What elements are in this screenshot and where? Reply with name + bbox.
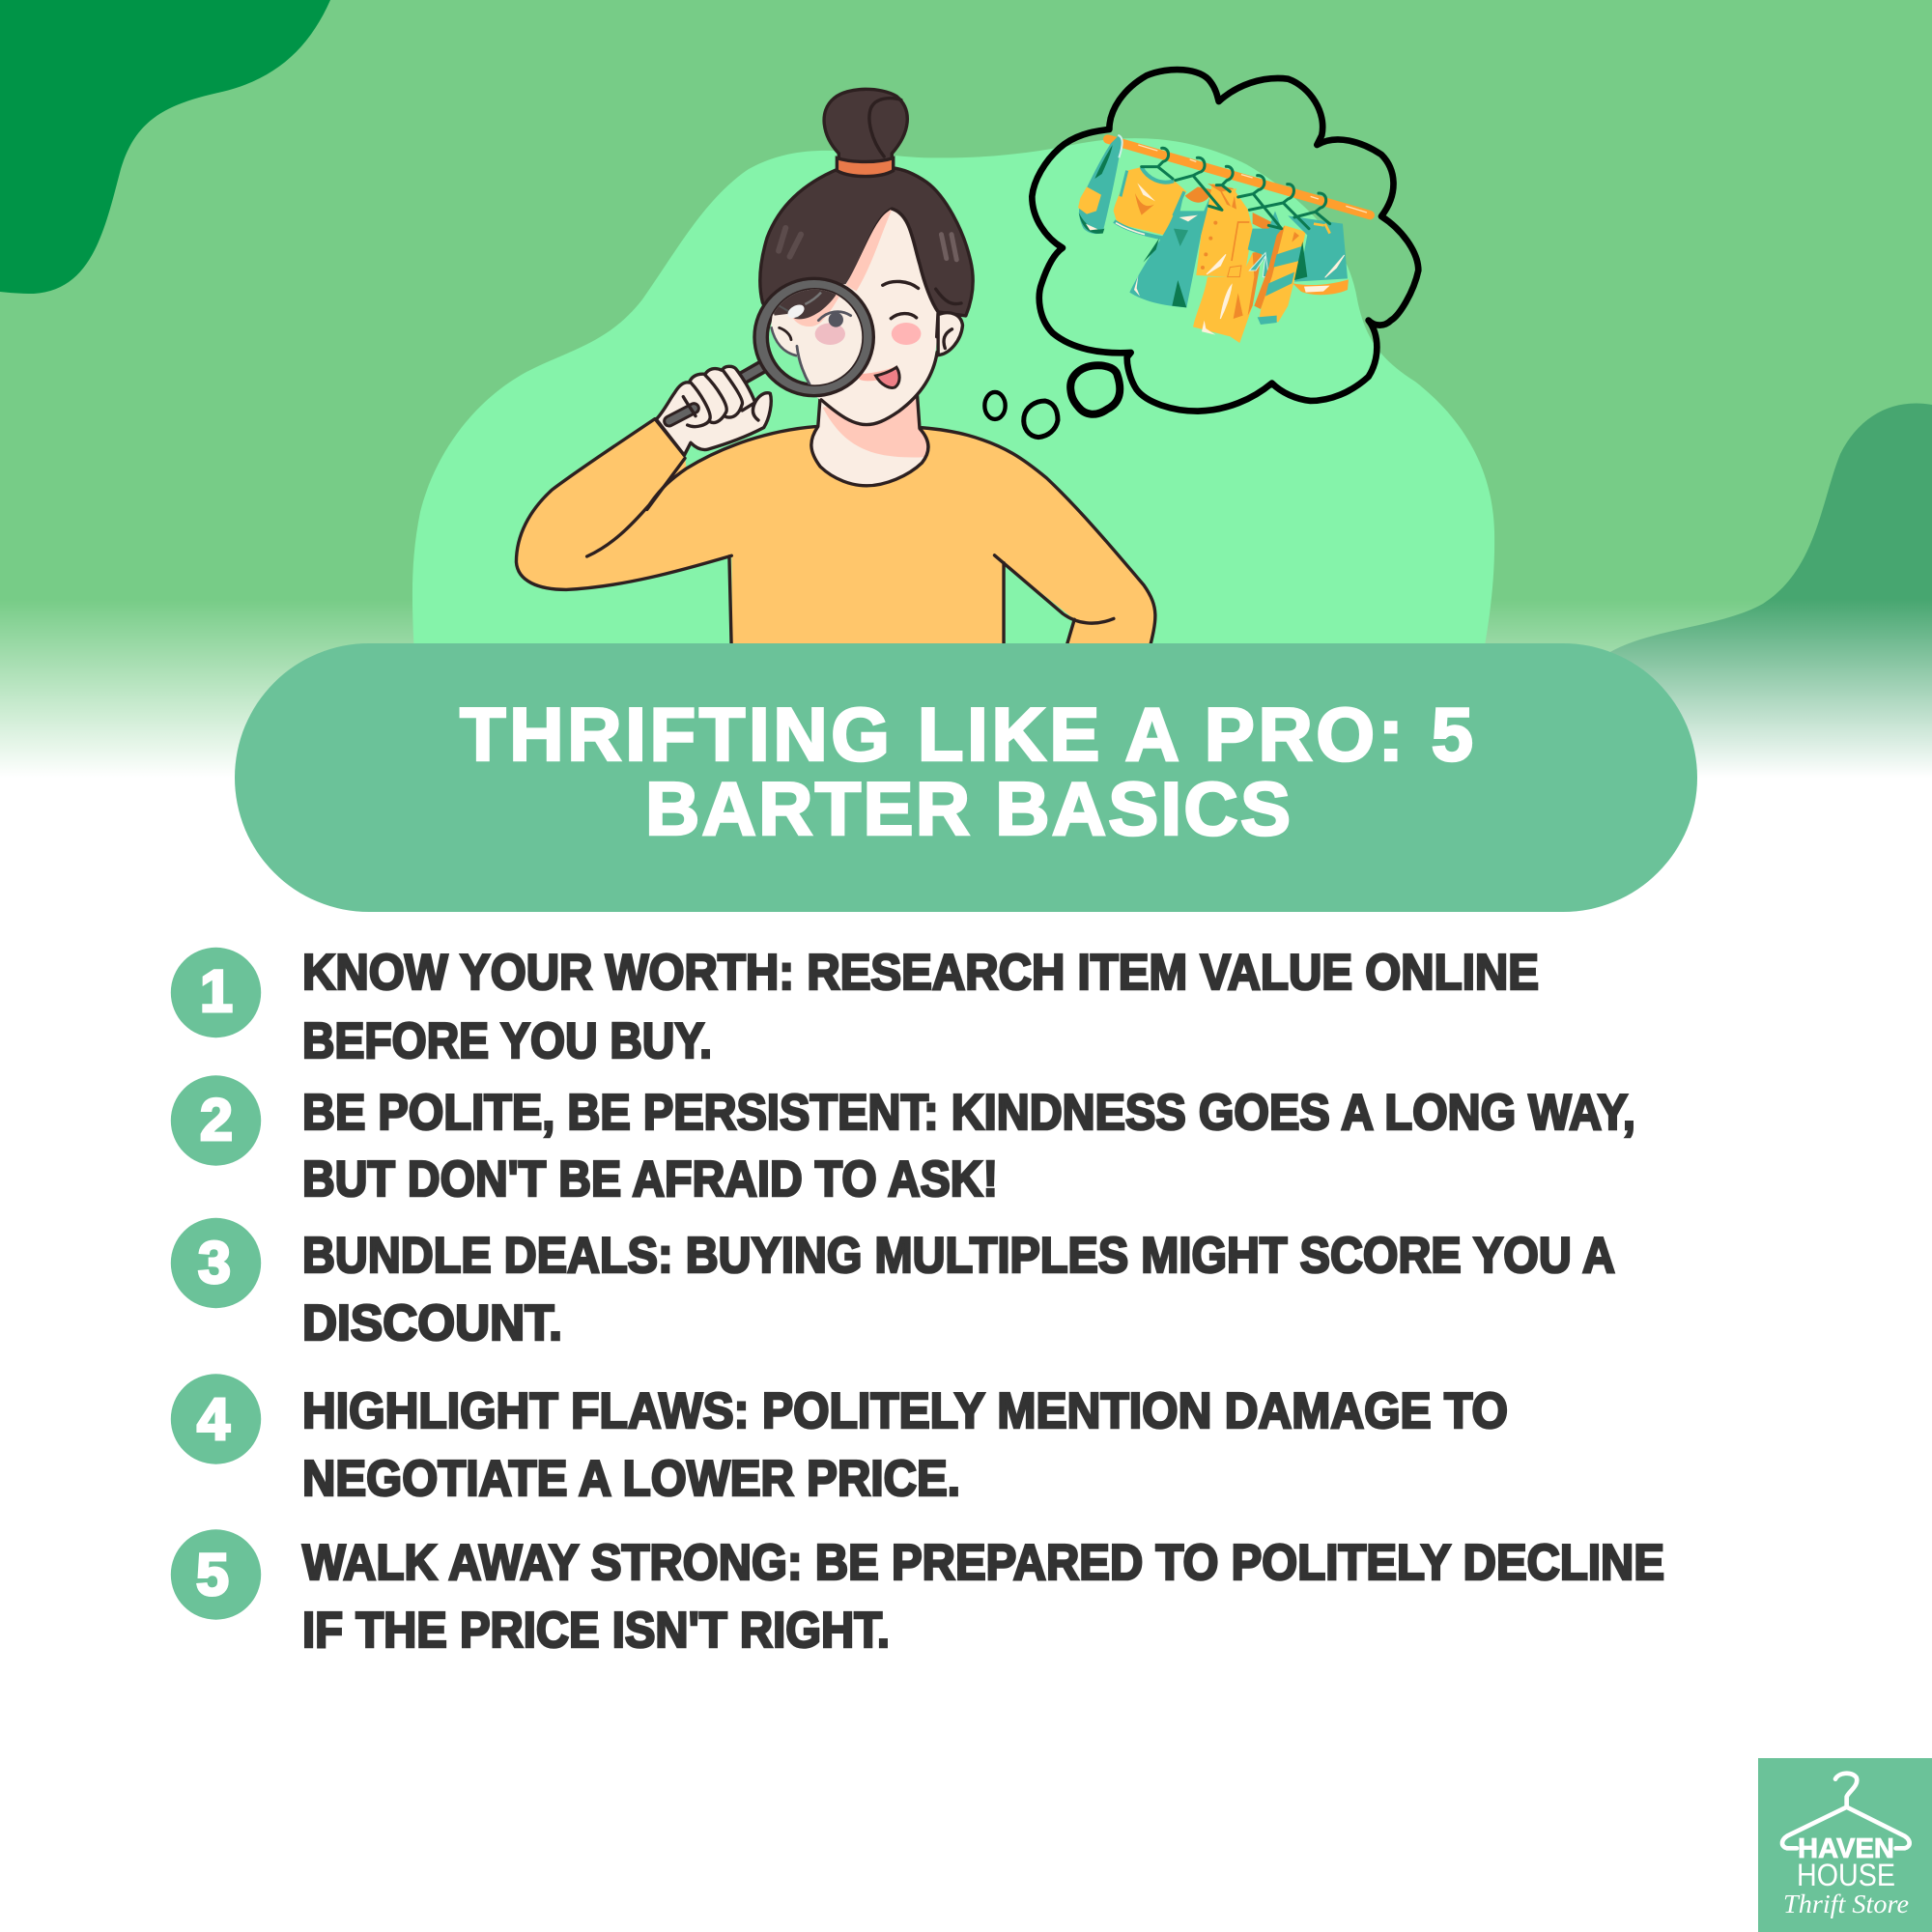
tip 4 text: HIGHLIGHT FLAWS: POLITELY MENTION DAMAGE TO (302, 1383, 1508, 1439)
clothes on a rail (1078, 135, 1370, 343)
tip 3 text: BUNDLE DEALS: BUYING MULTIPLES MIGHT SCORE YOU A (302, 1228, 1615, 1284)
character with magnifying glass (516, 89, 1155, 654)
logo: Haven House Thrift Store: Thrift Store (1783, 1889, 1909, 1918)
number badge 1 (171, 948, 261, 1037)
right ear (938, 313, 962, 355)
body, head and hair (516, 89, 1155, 654)
title: THRIFTING LIKE A PRO: 5 (460, 692, 1473, 777)
tip 5 (171, 1529, 1664, 1659)
tip 2 text (302, 1085, 1635, 1208)
teal wrap top with bow (1248, 211, 1282, 280)
tip 5 text: WALK AWAY STRONG: BE PREPARED TO POLITELY DECLINE (302, 1535, 1664, 1591)
green background (0, 0, 1932, 792)
bun and hair (760, 89, 973, 333)
tip 4 text: NEGOTIATE A LOWER PRICE. (302, 1451, 960, 1507)
icon: hanger (1782, 1774, 1910, 1848)
logo: Haven House Thrift Store (1758, 1758, 1932, 1932)
tip 2 text: BUT DON'T BE AFRAID TO ASK! (302, 1151, 998, 1208)
white fade over background (0, 599, 1932, 778)
tip 4 text (302, 1383, 1508, 1507)
clothes rail (1108, 139, 1370, 215)
blob: light green behind character (412, 138, 1494, 657)
cloud outline (1032, 70, 1418, 412)
tip 1 text: BEFORE YOU BUY. (302, 1013, 712, 1069)
hangers (1142, 148, 1330, 229)
number badge 3 (171, 1218, 261, 1308)
sleeve cuff (655, 419, 684, 455)
number badge 5: 5 (196, 1542, 229, 1607)
magnifying glass and hand (655, 278, 873, 455)
sweater (516, 419, 1155, 654)
number badge 1: 1 (200, 958, 233, 1024)
title (460, 692, 1473, 851)
tip 3 text (302, 1228, 1615, 1351)
number badge 2: 2 (200, 1087, 233, 1152)
number badge 4: 4 (197, 1386, 230, 1452)
mouth and tongue (857, 366, 896, 381)
logo: Haven House Thrift Store: HAVEN (1798, 1833, 1894, 1864)
blob: top-left dark green (0, 0, 330, 294)
yellow top (1114, 167, 1186, 239)
number badge 2 (171, 1075, 261, 1166)
tip 5 text (302, 1535, 1664, 1659)
tip 1 (171, 945, 1539, 1069)
title pill (235, 643, 1697, 912)
blob: right dark green (1608, 404, 1932, 792)
title: BARTER BASICS (645, 766, 1291, 851)
tip 3 text: DISCOUNT. (302, 1295, 562, 1351)
neck (811, 394, 928, 486)
teal shorts (1288, 215, 1349, 295)
thought bubble (984, 70, 1418, 438)
eyebrow (883, 281, 919, 288)
handbag (1078, 135, 1122, 234)
yellow shirt (1196, 184, 1253, 277)
tip 2 text: BE POLITE, BE PERSISTENT: KINDNESS GOES A LONG WAY, (302, 1085, 1635, 1141)
striped trousers (1254, 225, 1306, 325)
cheek (892, 323, 921, 345)
teal dress (1129, 186, 1214, 307)
tip 2 (171, 1075, 1635, 1208)
winking eye (891, 314, 917, 319)
logo: Haven House Thrift Store: HOUSE (1797, 1858, 1895, 1892)
face (779, 209, 962, 425)
number badge 3: 3 (198, 1230, 231, 1295)
hand holding handle (655, 366, 771, 455)
small thought bubbles (1070, 365, 1120, 414)
long yellow skirt (1193, 251, 1263, 343)
tip 1 text: KNOW YOUR WORTH: RESEARCH ITEM VALUE ONLINE (302, 945, 1539, 1001)
hair band (837, 158, 894, 177)
number badge 5 (171, 1529, 261, 1620)
tip 3 (171, 1218, 1615, 1351)
white lower background (0, 778, 1932, 1932)
magnifying glass (742, 278, 873, 396)
tip 1 text (302, 945, 1539, 1069)
number badge 4 (171, 1374, 261, 1464)
tip 5 text: IF THE PRICE ISN'T RIGHT. (302, 1603, 890, 1659)
tip 4 (171, 1374, 1508, 1507)
